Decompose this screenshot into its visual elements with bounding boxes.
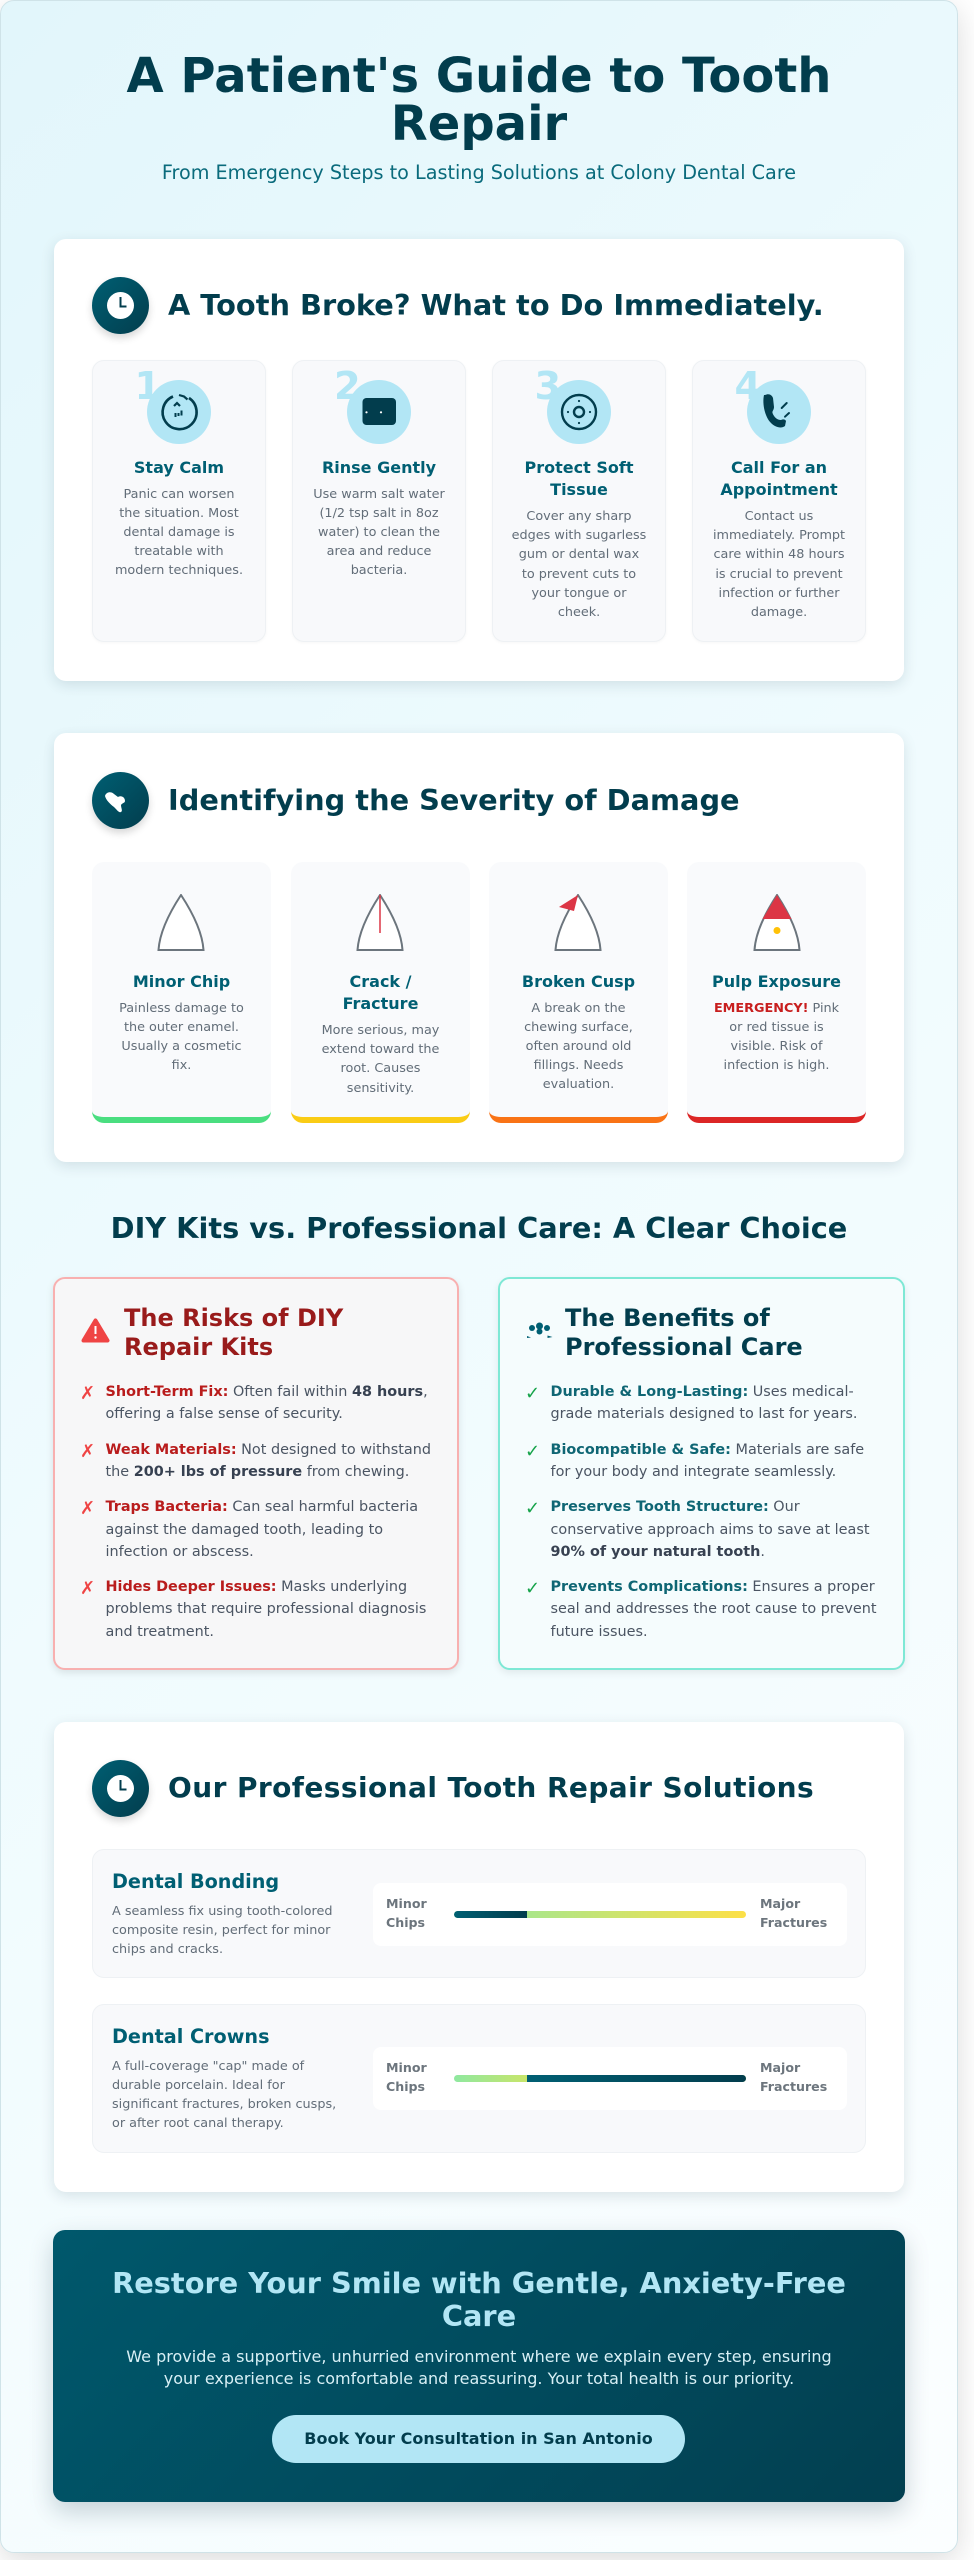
check 2: ✓ [525,1441,540,1462]
severity text: pulp exposure: visible. Risk of [731,1039,822,1054]
risk item 4: problems that require professional diagnosis [106,1601,426,1617]
risk item 1: Short-Term Fix: Often fail within 48 hours, [106,1384,428,1400]
CTA heading [112,2266,846,2333]
step title: protect soft tissue: Protect Soft [525,458,633,477]
severity text: broken cusp [524,1000,633,1092]
step text: rinse gently: (1/2 tsp salt in 8oz [319,506,439,521]
step text: call for an appointment: damage. [751,605,807,620]
risk item 4 [106,1579,426,1640]
step text: stay calm: the situation. Most [119,506,239,521]
icon: warning [82,1318,110,1342]
severity text: broken cusp: chewing surface, [524,1020,633,1035]
panel: risks of DIY [53,1277,459,1670]
severity text: crack: More serious, may [322,1023,439,1038]
step title: protect soft tissue [525,458,634,499]
benefit item 4: future issues. [550,1624,648,1640]
solution title: bonding: Dental Bonding [112,1870,279,1893]
benefit item 1: grade materials designed to last for years. [550,1406,857,1422]
severity text: minor chip: Painless damage to [119,1000,244,1016]
solution title: crowns: Dental Crowns [112,2025,270,2048]
severity text: minor chip: the outer enamel. [124,1020,239,1035]
scale box: bonding [373,1883,847,1946]
step text: call for an appointment: immediately. Prompt [713,528,845,543]
icon: broken tooth [92,772,149,829]
scale label: major: Fractures [760,2079,827,2094]
tooth diagram: minor chip [157,894,205,951]
step title: call for an appointment: Call For an [731,458,827,477]
step text: call for an appointment: care within 48 hours [713,547,844,562]
step text: protect soft tissue: gum or dental wax [519,547,639,562]
step number 1: 1 [134,364,161,409]
severity card: broken cusp [489,862,668,1123]
risk item 1 [106,1384,428,1422]
CTA heading: Restore Your Smile with Gentle, Anxiety-Free [112,2266,846,2300]
benefit item 4: Prevents Complications: Ensures a proper [550,1579,875,1595]
step title: call for an appointment [720,458,838,499]
CTA text: We provide a supportive, unhurried environment where we explain every step, ensuring [126,2347,832,2366]
solution text: crowns: or after root canal therapy. [112,2116,284,2131]
title [126,48,831,152]
severity text: crack [322,1023,439,1096]
step title: protect soft tissue: Tissue [550,480,608,499]
severity text: pulp exposure [714,1000,839,1073]
risk item 3: against the damaged tooth, leading to [106,1522,383,1538]
scale label: major: Major [760,2060,800,2075]
step text: stay calm [115,486,243,578]
solution card: dental bonding [92,1849,866,1978]
step text: stay calm: dental damage is [123,525,235,540]
title: A Patient's Guide to Tooth [127,48,831,104]
heading: solutions: Our Professional Tooth Repair Solutions [168,1771,814,1804]
icon: phone [747,380,811,444]
icon: calm breathing [147,380,211,444]
heading: risks: Repair Kits [124,1333,273,1361]
solution text: bonding: composite resin, perfect for minor [112,1923,330,1938]
scale bar: bonding [454,1911,746,1918]
mark 2: ✗ [80,1441,95,1462]
step text: call for an appointment: Contact us [745,509,813,524]
severity text: minor chip: Usually a cosmetic [121,1039,242,1054]
step card 1 [92,360,266,642]
step number 2: 2 [334,364,361,409]
benefit item 1 [550,1384,857,1422]
heading: risks [124,1304,344,1361]
severity text: broken cusp: often around old [526,1039,631,1054]
severity text: crack: sensitivity. [347,1081,414,1096]
risk item 3: infection or abscess. [106,1544,254,1560]
step text: stay calm: Panic can worsen [123,486,235,502]
solution text: bonding: chips and cracks. [112,1942,223,1957]
icon: protect tissue [547,380,611,444]
benefit item 3: Preserves Tooth Structure: Our [550,1499,800,1515]
solution text: bonding [112,1904,332,1957]
benefit item 4: seal and addresses the root cause to prevent [550,1601,876,1617]
step card 4 [692,360,866,642]
step text: call for an appointment: is crucial to prevent [715,567,843,582]
severity title: crack: Fracture [343,994,418,1013]
CTA text: your experience is comfortable and reassuring. Your total health is our priority. [164,2369,794,2388]
step text: protect soft tissue: your tongue or [531,586,627,601]
step title: rinse gently: Rinse Gently [322,458,436,477]
mark 3: ✗ [80,1498,95,1519]
severity title: crack: Crack / [350,972,411,991]
step text: call for an appointment: infection or further [719,586,839,601]
tooth diagram: pulp exposure [753,894,801,951]
icon: rinse [347,380,411,444]
panel: call to action [53,2230,905,2502]
panel: benefits of professional care [498,1277,905,1670]
scale label: major [760,1896,827,1930]
risk item 2: the 200+ lbs of pressure from chewing. [106,1464,409,1480]
severity card: pulp exposure [687,862,866,1123]
solution text: crowns: durable porcelain. Ideal for [112,2078,285,2093]
risk item 2 [106,1442,431,1480]
check 3: ✓ [525,1498,540,1519]
severity text: broken cusp: fillings. Needs [534,1058,623,1073]
severity card: crack [291,862,470,1123]
severity title: pulp exposure: Pulp Exposure [712,972,841,991]
icon: people care [527,1322,552,1338]
risk item 2: Weak Materials: Not designed to withstand [106,1442,431,1458]
severity text: pulp exposure: or red tissue is [729,1020,824,1035]
step text: protect soft tissue: edges with sugarless [512,528,646,543]
solution text: crowns: significant fractures, broken cusps, [112,2097,336,2112]
step text: rinse gently [313,486,445,578]
heading: benefits [565,1304,803,1361]
solution text: bonding: A seamless fix using tooth-colored [112,1904,332,1918]
check 4: ✓ [525,1578,540,1599]
mark 1: ✗ [80,1383,95,1404]
step text: stay calm: modern techniques. [115,563,243,578]
tooth diagram: broken cusp [554,894,602,951]
step card 3 [492,360,666,642]
risk item 4: and treatment. [106,1624,214,1640]
step number 3: 3 [534,364,561,409]
CTA button: Book Your Consultation in San Antonio [304,2429,653,2448]
scale label: major: Major [760,1896,800,1911]
severity text: pulp exposure: infection is high. [724,1058,829,1073]
panel: professional solutions [54,1722,904,2192]
risk item 1: offering a false sense of security. [106,1406,343,1422]
step text: rinse gently: water) to clean the [318,525,440,540]
severity text: minor chip: fix. [172,1058,191,1073]
CTA text [126,2347,832,2388]
scale label: major [760,2060,827,2094]
benefit item 2 [550,1442,864,1480]
severity text: pulp exposure: EMERGENCY! Pink [714,1000,839,1016]
heading: risks: The Risks of DIY [124,1304,343,1332]
benefit item 4 [550,1579,876,1640]
step text: rinse gently: bacteria. [351,563,407,578]
step number 4: 4 [734,364,761,409]
step text: rinse gently: area and reduce [327,544,431,559]
scale label: major: Fractures [760,1915,827,1930]
severity text: crack: root. Causes [341,1061,420,1076]
heading: severity: Identifying the Severity of Damage [168,783,740,817]
step text: protect soft tissue: to prevent cuts to [522,567,636,582]
CTA heading: Care [442,2299,516,2333]
panel: severity of damage [54,733,904,1162]
step title: call for an appointment: Appointment [720,480,838,499]
benefit item 2: for your body and integrate seamlessly. [550,1464,836,1480]
icon: clock [92,1760,149,1817]
severity title: broken cusp: Broken Cusp [522,972,635,991]
benefit item 1: Durable & Long-Lasting: Uses medical- [550,1384,854,1400]
risk item 4: Hides Deeper Issues: Masks underlying [106,1579,407,1595]
scale label: minor: Chips [386,1915,425,1930]
title: Repair [391,96,567,152]
risk list [80,1383,431,1640]
severity text: crack: extend toward the [322,1042,439,1057]
severity title: minor chip: Minor Chip [133,972,230,991]
severity title: crack [343,972,418,1013]
benefit item 3 [550,1499,870,1560]
CTA button [272,2415,685,2463]
severity text: minor chip [119,1000,244,1073]
risk item 3 [106,1499,418,1560]
heading: benefits: The Benefits of [565,1304,770,1332]
heading: benefits: Professional Care [565,1333,803,1361]
step text: call for an appointment [713,509,845,620]
check 1: ✓ [525,1383,540,1404]
solution text: crowns: A full-coverage "cap" made of [112,2058,304,2074]
benefit item 3: conservative approach aims to save at least [550,1522,869,1538]
tooth diagram: crack [356,894,404,951]
severity text: broken cusp: A break on the [531,1000,626,1016]
severity text: broken cusp: evaluation. [543,1077,614,1092]
step text: stay calm: treatable with [134,544,224,559]
subtitle: From Emergency Steps to Lasting Solutions at Colony Dental Care [162,161,796,184]
icon: clock [92,277,149,334]
severity card: minor chip [92,862,271,1123]
step text: rinse gently: Use warm salt water [313,486,445,502]
benefit list [525,1383,876,1640]
scale label: minor [386,1896,427,1930]
scale label: minor: Minor [386,1896,427,1911]
solution text: crowns [112,2058,336,2131]
benefit item 2: Biocompatible & Safe: Materials are safe [550,1442,864,1458]
benefit item 3: 90% of your natural tooth. [550,1544,765,1560]
step title: stay calm: Stay Calm [134,458,224,477]
step text: protect soft tissue [512,509,646,620]
scale box: crowns [373,2047,847,2110]
heading: what to do immediately: A Tooth Broke? What to Do Immediately. [168,288,824,322]
step text: protect soft tissue: Cover any sharp [526,509,632,524]
panel: immediate steps [54,239,904,681]
heading: DIY vs professional: DIY Kits vs. Professional Care: A Clear Choice [111,1211,847,1245]
scale label: minor: Chips [386,2079,425,2094]
step card 2 [292,360,466,642]
step text: protect soft tissue: cheek. [558,605,600,620]
solution card: dental crowns [92,2004,866,2153]
mark 4: ✗ [80,1578,95,1599]
scale label: minor [386,2060,427,2094]
scale label: minor: Minor [386,2060,427,2075]
risk item 3: Traps Bacteria: Can seal harmful bacteria [106,1499,418,1515]
scale bar: crowns [454,2075,746,2082]
